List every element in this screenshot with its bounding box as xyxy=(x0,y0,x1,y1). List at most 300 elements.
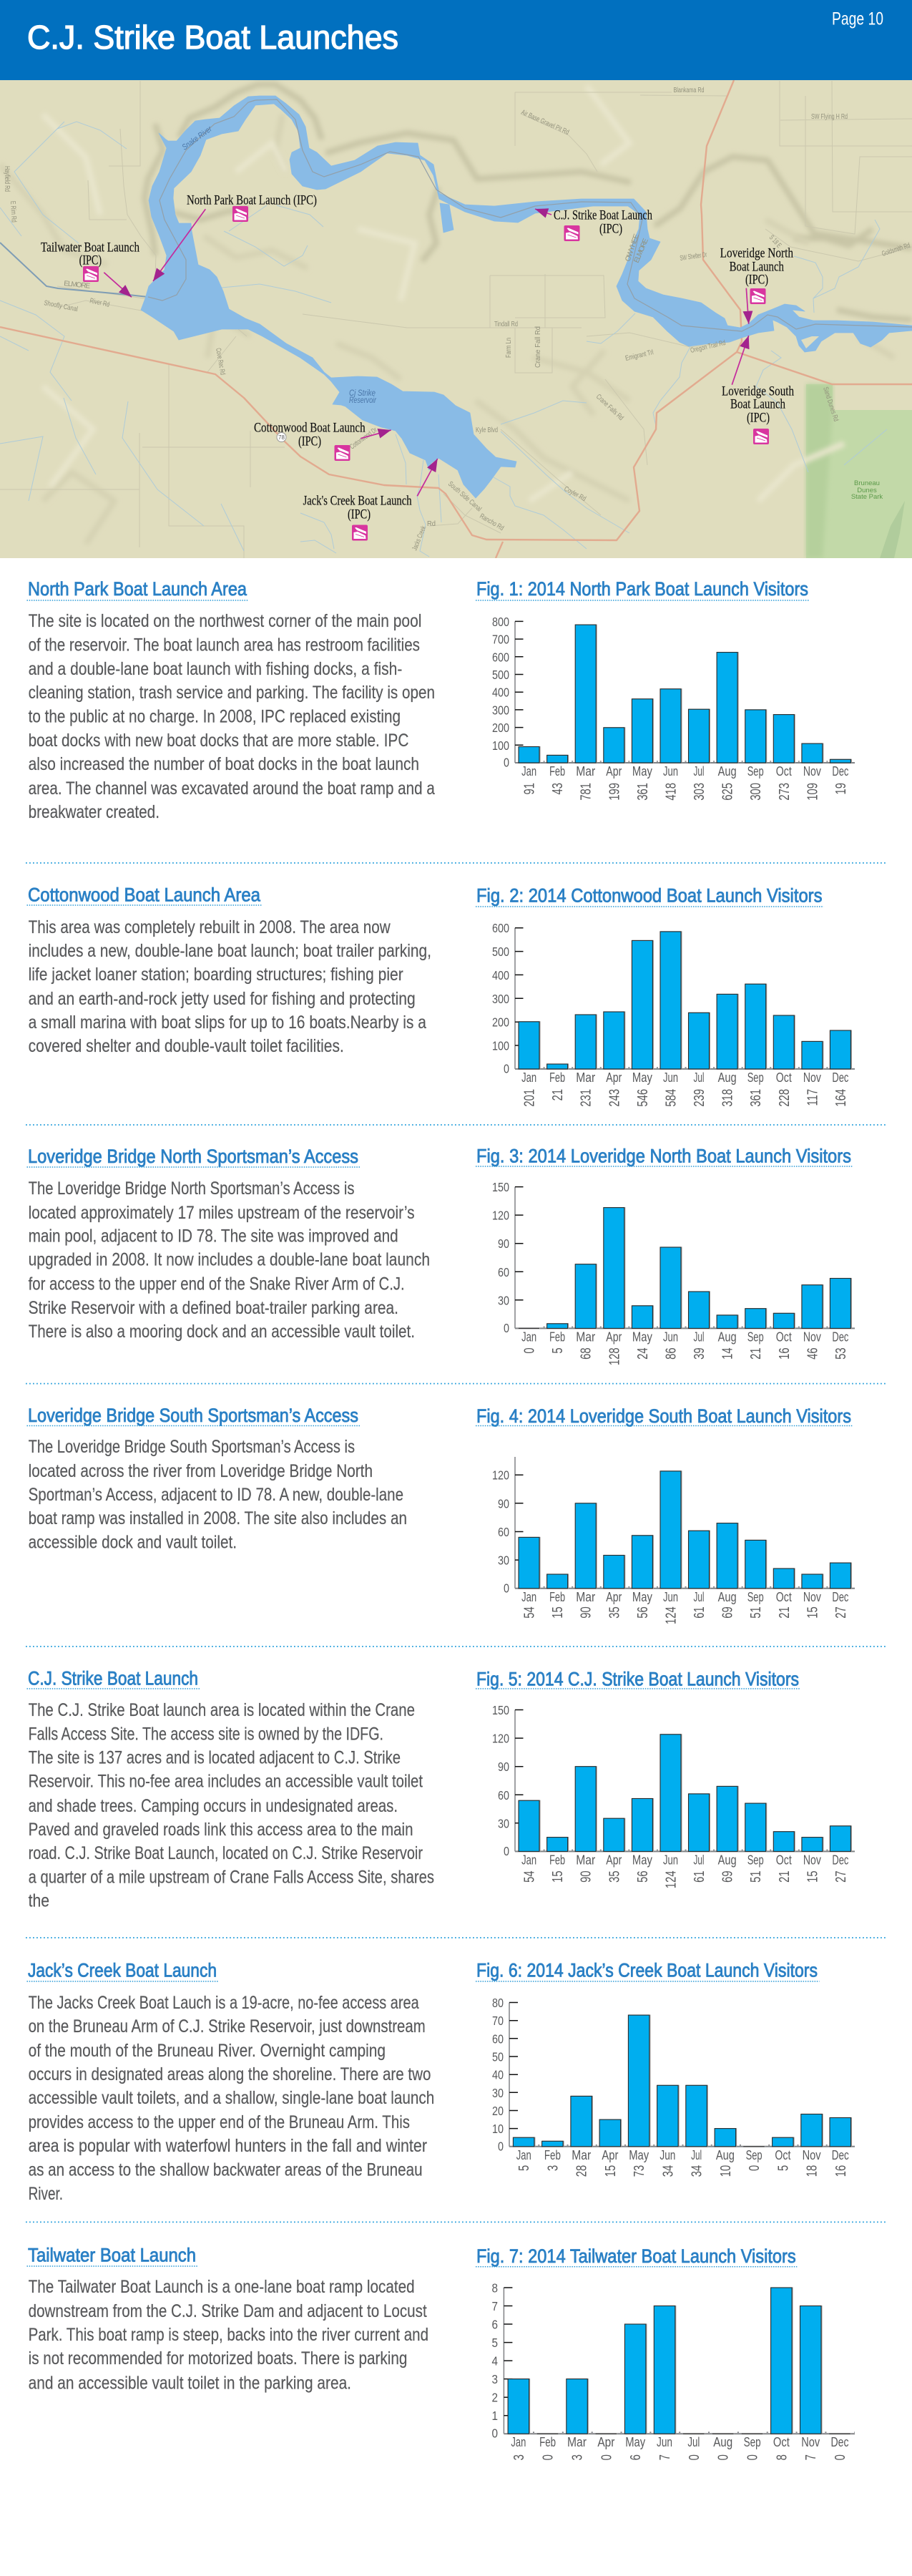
map place names: Blankama Rd xyxy=(674,87,704,94)
bar chart: Fig 3 Loveridge North: 30 xyxy=(498,1294,509,1308)
bar chart: Fig 2 Cottonwood: Apr xyxy=(606,1070,622,1085)
body text: Sportman’s Access, adjacent to ID 78. A new, double-lane xyxy=(29,1485,403,1505)
bar chart: Fig 2 Cottonwood: 164 xyxy=(833,1089,848,1107)
bar chart: Fig 6 Jack's Creek: Jun xyxy=(660,2148,675,2162)
bar chart: Fig 1 North Park: 91 xyxy=(521,783,537,794)
body text xyxy=(29,1993,434,2204)
bar chart: Fig 3 Loveridge North: 68 xyxy=(578,1347,594,1360)
bar chart: Fig 2 Cottonwood: 584 xyxy=(662,1089,679,1107)
bar chart: Fig 5 C.J. Strike: 0 xyxy=(504,1844,509,1858)
bar chart: Fig 7 Tailwater: 3 xyxy=(569,2454,585,2460)
bar chart: Fig 5 C.J. Strike: Mar xyxy=(576,1853,595,1867)
bar chart: Fig 6 Jack's Creek: 70 xyxy=(492,2014,504,2029)
bar chart: Fig 1 North Park: Jan xyxy=(521,764,536,779)
body text: a small marina with boat slips for up to 16 boats.Nearby is a xyxy=(29,1013,426,1033)
bar chart: Fig 5 C.J. Strike: 54 xyxy=(521,1870,537,1883)
panel: Jack's Creek text xyxy=(27,1960,434,2204)
callout: C.J. Strike xyxy=(535,208,652,241)
callout: Tailwater: (IPC) xyxy=(79,253,102,268)
bar chart: Fig 3 Loveridge North: 150 xyxy=(492,1181,509,1195)
bar chart: Fig 2 Cottonwood: Dec xyxy=(832,1070,848,1085)
bar chart: Fig 4 Loveridge South: Oct xyxy=(776,1590,792,1604)
bar chart: Fig 7 Tailwater: 0 xyxy=(598,2454,614,2460)
callout: Tailwater: Tailwater Boat Launch xyxy=(41,240,139,255)
bar chart: Fig 7 Tailwater: 0 xyxy=(832,2454,848,2460)
bar chart: Fig 1 North Park: Dec xyxy=(832,764,848,779)
bar chart: Fig 1 North Park: 800 xyxy=(492,615,509,629)
bar chart: Fig 5 C.J. Strike: Jan xyxy=(521,1853,536,1867)
bar chart: Fig 6 Jack's Creek: Mar xyxy=(572,2148,591,2162)
callout: C.J. Strike: C.J. Strike Boat Launch xyxy=(554,208,652,223)
highways xyxy=(0,80,912,558)
callout: Loveridge North: (IPC) xyxy=(745,272,768,287)
map place names: Emigrant Trl xyxy=(624,348,654,363)
bar chart: Fig 7 Tailwater: 4 xyxy=(491,2353,498,2368)
bar chart: Fig 2 Cottonwood: Oct xyxy=(776,1070,792,1085)
map place names: Hayfield Rd xyxy=(3,166,11,192)
bar chart: Fig 3 Loveridge North: 21 xyxy=(747,1347,764,1360)
map of boat launches xyxy=(0,80,912,558)
bar chart: Fig 5 C.J. Strike: 60 xyxy=(498,1788,509,1802)
map place names: Snake River xyxy=(181,125,214,152)
bar chart: Fig 4 Loveridge South: Jun xyxy=(663,1590,678,1604)
callout: Loveridge North: Boat Launch xyxy=(730,260,784,275)
bar chart: Fig 6 Jack's Creek: 15 xyxy=(602,2165,618,2177)
bar chart: Fig 5 C.J. Strike: Oct xyxy=(776,1853,792,1867)
panel: C.J. Strike text xyxy=(27,1667,434,1911)
map place names xyxy=(3,87,911,552)
map place names: Tindall Rd xyxy=(494,321,518,328)
state park area xyxy=(806,384,912,558)
bar chart: Fig 4 Loveridge South: Aug xyxy=(718,1590,737,1604)
bar chart: Fig 7 Tailwater: 2 xyxy=(491,2391,498,2405)
bar chart: Fig 5 C.J. Strike: Apr xyxy=(606,1853,622,1867)
body text: accessible vault toilets, and a shallow, single-lane boat launch xyxy=(29,2088,434,2108)
bar chart: Fig 7 Tailwater: Mar xyxy=(567,2435,587,2449)
bar chart: Fig 5 C.J. Strike: Aug xyxy=(718,1853,737,1867)
map place names: SW Shelter Dr xyxy=(680,251,707,263)
map place names: E Rim Rd xyxy=(9,201,18,223)
bar chart: Fig 3 Loveridge North: 86 xyxy=(662,1347,679,1360)
bar chart: Fig 6 Jack's Creek: 10 xyxy=(717,2165,733,2177)
body text: the xyxy=(29,1891,49,1911)
bar chart: Fig 3 Loveridge North: Jul xyxy=(694,1330,704,1344)
bar chart: Fig 4 Loveridge South: Apr xyxy=(606,1590,622,1604)
body text: breakwater created. xyxy=(29,802,160,822)
callout: Cottonwood: Cottonwood Boat Launch xyxy=(254,421,366,436)
bar chart: Fig 5 C.J. Strike: 61 xyxy=(691,1870,707,1883)
bar chart: Fig 6 Jack's Creek: Nov xyxy=(803,2148,821,2162)
bar chart: Fig 4 Loveridge South: 69 xyxy=(719,1606,735,1619)
bar chart: Fig 2 Cottonwood: 239 xyxy=(691,1089,707,1107)
bar chart: Fig 3 Loveridge North: 16 xyxy=(776,1347,792,1360)
body text: Park. This boat ramp is steep, backs into the river current and xyxy=(29,2325,428,2345)
map place names: Dunes xyxy=(857,487,877,494)
bar chart: Fig 5 C.J. Strike: 124 xyxy=(662,1870,679,1888)
bar chart: Fig 4 Loveridge South: 61 xyxy=(691,1606,707,1619)
bar chart: Fig 1 North Park: Jun xyxy=(663,764,678,779)
bar chart: Fig 4 Loveridge South xyxy=(492,1457,855,1624)
bar chart: Fig 7 Tailwater: 7 xyxy=(803,2454,819,2460)
body text: boat docks with new boat docks that are more stable. IPC xyxy=(29,731,408,751)
bar chart: Fig 5 C.J. Strike xyxy=(492,1704,855,1888)
bar chart: Fig 2 Cottonwood: 243 xyxy=(606,1089,622,1107)
figure heading 2: Fig. 2: 2014 Cottonwood Boat Launch Visitors xyxy=(476,885,823,907)
map place names: OWYHEE xyxy=(624,233,641,263)
body text: area. The channel was excavated around the boat ramp and a xyxy=(29,779,435,799)
map place names: ELMORE xyxy=(64,280,91,291)
bar chart: Fig 3 Loveridge North: Aug xyxy=(718,1330,737,1344)
bar chart: Fig 6 Jack's Creek xyxy=(492,1996,855,2177)
body text: also increased the number of boat docks in the boat launch xyxy=(29,754,419,774)
figure heading 5: Fig. 5: 2014 C.J. Strike Boat Launch Visitors xyxy=(476,1669,799,1690)
bar chart: Fig 1 North Park: 19 xyxy=(833,783,848,794)
callout: Jack's Creek: Jack's Creek Boat Launch xyxy=(303,494,412,509)
bar chart: Fig 2 Cottonwood: Jun xyxy=(663,1070,678,1085)
bar chart: Fig 7 Tailwater: Oct xyxy=(773,2435,790,2449)
body text: of the mouth of the Bruneau River. Overnight camping xyxy=(29,2041,386,2061)
bar chart: Fig 7 Tailwater: 0 xyxy=(491,2426,498,2441)
bar chart: Fig 4 Loveridge South: 15 xyxy=(804,1606,820,1619)
bar chart: Fig 3 Loveridge North xyxy=(492,1181,855,1365)
heading: Tailwater Boat Launch xyxy=(28,2245,196,2266)
bar chart: Fig 2 Cottonwood: 600 xyxy=(492,922,509,936)
callout: C.J. Strike: (IPC) xyxy=(599,222,622,236)
body text: The Tailwater Boat Launch is a one-lane boat ramp located xyxy=(29,2277,415,2297)
bar chart: Fig 7 Tailwater: 1 xyxy=(491,2409,498,2424)
heading: Loveridge Bridge South Sportsman’s Access xyxy=(28,1405,358,1426)
bar chart: Fig 5 C.J. Strike: 15 xyxy=(804,1870,820,1883)
bar chart: Fig 2 Cottonwood: 21 xyxy=(549,1089,566,1101)
bar chart: Fig 2 Cottonwood: 500 xyxy=(492,945,509,960)
bar chart: Fig 1 North Park: Aug xyxy=(718,764,737,779)
bar chart: Fig 1 North Park: Apr xyxy=(606,764,622,779)
bar chart: Fig 7 Tailwater: 0 xyxy=(744,2454,760,2460)
bar chart: Fig 1 North Park: 200 xyxy=(492,721,509,736)
bar chart: Fig 3 Loveridge North: Sep xyxy=(747,1330,764,1344)
highway 78 shield xyxy=(277,432,286,442)
bar chart: Fig 2 Cottonwood: 318 xyxy=(719,1089,735,1107)
body text: located across the river from Loveridge Bridge North xyxy=(29,1461,373,1481)
map place names: State Park xyxy=(851,493,883,501)
body text: on the Bruneau Arm of C.J. Strike Reservoir, just downstream xyxy=(29,2016,426,2036)
bar chart: Fig 5 C.J. Strike: 90 xyxy=(498,1760,509,1775)
bar chart: Fig 6 Jack's Creek: 16 xyxy=(833,2165,848,2177)
bar chart: Fig 6 Jack's Creek: 5 xyxy=(516,2165,532,2171)
bar chart: Fig 4 Loveridge South: Sep xyxy=(747,1590,764,1604)
bar chart: Fig 5 C.J. Strike: 35 xyxy=(606,1870,622,1883)
bar chart: Fig 3 Loveridge North: Oct xyxy=(776,1330,792,1344)
bar chart: Fig 1 North Park: 300 xyxy=(747,783,764,801)
map place names: River Rd xyxy=(89,297,110,309)
bar chart: Fig 4 Loveridge South: Nov xyxy=(803,1590,821,1604)
body text: River. xyxy=(29,2184,63,2204)
bar chart: Fig 3 Loveridge North: 60 xyxy=(498,1265,509,1279)
bar chart: Fig 2 Cottonwood: 300 xyxy=(492,992,509,1006)
callout: Jack's Creek xyxy=(303,459,438,541)
bar chart: Fig 1 North Park: 43 xyxy=(549,783,566,794)
bar chart: Fig 4 Loveridge South: 0 xyxy=(504,1581,509,1596)
bar chart: Fig 6 Jack's Creek: Sep xyxy=(746,2148,763,2162)
panel: Loveridge North text xyxy=(27,1146,430,1342)
bar chart: Fig 6 Jack's Creek: Jan xyxy=(516,2148,531,2162)
map place names: Crane Falls Rd xyxy=(594,393,625,422)
bar chart: Fig 3 Loveridge North: 0 xyxy=(504,1321,509,1335)
body text: road. C.J. Strike Boat Launch, located on C.J. Strike Reservoir xyxy=(29,1843,423,1863)
body text: The site is 137 acres and is located adjacent to C.J. Strike xyxy=(29,1748,401,1768)
callout: Tailwater xyxy=(41,240,139,297)
body text: of the reservoir. The boat launch area has restroom facilities xyxy=(29,635,420,655)
body text: occurs in designated areas along the shoreline. There are two xyxy=(29,2064,431,2084)
body text: The Loveridge Bridge South Sportsman’s Access is xyxy=(29,1437,355,1457)
callout: Loveridge South: Loveridge South xyxy=(722,384,794,399)
bar chart: Fig 7 Tailwater xyxy=(491,2280,855,2460)
minor roads xyxy=(0,81,912,558)
bar chart: Fig 2 Cottonwood: Jul xyxy=(694,1070,704,1085)
bar chart: Fig 2 Cottonwood: Feb xyxy=(549,1070,565,1085)
body text: The Loveridge Bridge North Sportsman’s Access is xyxy=(29,1179,354,1199)
bar chart: Fig 6 Jack's Creek: 5 xyxy=(775,2165,791,2171)
bar chart: Fig 5 C.J. Strike: 51 xyxy=(747,1870,764,1883)
bar chart: Fig 1 North Park: Feb xyxy=(549,764,565,779)
body text: downstream from the C.J. Strike Dam and adjacent to Locust xyxy=(29,2301,427,2321)
map place names: Shoofly Canal xyxy=(43,299,79,313)
map place names: Cj Strike xyxy=(349,389,376,398)
bar chart: Fig 6 Jack's Creek: Jul xyxy=(691,2148,702,2162)
bar chart: Fig 5 C.J. Strike: Feb xyxy=(549,1853,565,1867)
bar chart: Fig 7 Tailwater: 6 xyxy=(627,2454,644,2460)
body text: for access to the upper end of the Snake River Arm of C.J. xyxy=(29,1274,405,1294)
map place names: Rancho Rd xyxy=(478,512,505,532)
bar chart: Fig 7 Tailwater: 0 xyxy=(686,2454,702,2460)
body text: is not recommended for motorized boats. There is parking xyxy=(29,2348,407,2368)
bar chart: Fig 3 Loveridge North: Dec xyxy=(832,1330,848,1344)
bar chart: Fig 7 Tailwater: 3 xyxy=(491,2372,498,2386)
bar chart: Fig 6 Jack's Creek: 28 xyxy=(574,2165,589,2177)
bar chart: Fig 2 Cottonwood: 546 xyxy=(634,1089,650,1107)
body text: provides access to the upper end of the Bruneau Arm. This xyxy=(29,2112,410,2132)
body text: The Jacks Creek Boat Lauch is a 19-acre, no-fee access area xyxy=(29,1993,419,2013)
bar chart: Fig 1 North Park: 700 xyxy=(492,633,509,647)
body text: Reservoir. This no-fee area includes an accessible vault toilet xyxy=(29,1772,423,1792)
callout: North Park xyxy=(153,193,317,281)
bar chart: Fig 6 Jack's Creek: 20 xyxy=(492,2104,504,2118)
bar chart: Fig 6 Jack's Creek: 80 xyxy=(492,1996,504,2010)
map place names: S 18 E xyxy=(768,234,783,250)
title: C.J. Strike Boat Launches xyxy=(27,19,398,56)
body text: The site is located on the northwest corner of the main pool xyxy=(29,611,421,631)
body text: accessible dock and vault toilet. xyxy=(29,1533,237,1553)
bar chart: Fig 4 Loveridge South: Feb xyxy=(549,1590,565,1604)
map place names: ELMORE xyxy=(633,237,650,264)
bar chart: Fig 7 Tailwater: 7 xyxy=(491,2299,498,2313)
bar chart: Fig 6 Jack's Creek: Oct xyxy=(775,2148,790,2162)
bar chart: Fig 5 C.J. Strike: 30 xyxy=(498,1817,509,1831)
bar chart: Fig 2 Cottonwood: Jan xyxy=(521,1070,536,1085)
bar chart: Fig 2 Cottonwood: May xyxy=(632,1070,652,1085)
bar chart: Fig 1 North Park: 273 xyxy=(776,783,792,801)
bar chart: Fig 6 Jack's Creek: Aug xyxy=(716,2148,735,2162)
body text: located approximately 17 miles upstream of the reservoir’s xyxy=(29,1203,415,1223)
map place names: Kyle Blvd xyxy=(476,426,498,434)
callout: Loveridge South xyxy=(722,336,794,444)
heading: C.J. Strike Boat Launch xyxy=(28,1667,198,1689)
bar chart: Fig 6 Jack's Creek: Feb xyxy=(544,2148,561,2162)
bar chart: Fig 6 Jack's Creek: 50 xyxy=(492,2050,504,2064)
bar chart: Fig 6 Jack's Creek: 0 xyxy=(746,2165,763,2171)
body text xyxy=(29,611,435,822)
bar chart: Fig 2 Cottonwood: 231 xyxy=(578,1089,594,1107)
light terrain highlights xyxy=(43,86,844,501)
bar chart: Fig 7 Tailwater: Dec xyxy=(831,2435,848,2449)
bar chart: Fig 5 C.J. Strike: 27 xyxy=(833,1870,848,1883)
bar chart: Fig 4 Loveridge South: 51 xyxy=(747,1606,764,1619)
bar chart: Fig 4 Loveridge South: 56 xyxy=(634,1606,650,1619)
body text: Strike Reservoir with a defined boat-trailer parking area. xyxy=(29,1298,398,1318)
bar chart: Fig 4 Loveridge South: 15 xyxy=(549,1606,566,1619)
bar chart: Fig 1 North Park: 361 xyxy=(634,783,650,801)
map place names: Sand Dunes Rd xyxy=(821,386,840,422)
bar chart: Fig 1 North Park: 418 xyxy=(662,783,679,801)
bar chart: Fig 4 Loveridge South: Mar xyxy=(576,1590,595,1604)
bar chart: Fig 3 Loveridge North: May xyxy=(632,1330,652,1344)
soft terrain shading xyxy=(0,114,894,544)
bar chart: Fig 1 North Park: 109 xyxy=(804,783,820,801)
body text: and an earth-and-rock jetty used for fishing and protecting xyxy=(29,989,416,1009)
bar chart: Fig 2 Cottonwood: 228 xyxy=(776,1089,792,1107)
bar chart: Fig 4 Loveridge South: 35 xyxy=(606,1606,622,1619)
bar chart: Fig 5 C.J. Strike: May xyxy=(632,1853,652,1867)
bar chart: Fig 7 Tailwater: 7 xyxy=(657,2454,673,2460)
body text: There is also a mooring dock and an accessible vault toilet. xyxy=(29,1322,415,1342)
bar chart: Fig 2 Cottonwood: 100 xyxy=(492,1039,509,1053)
land pockets in river xyxy=(801,336,819,348)
callout: North Park: North Park Boat Launch (IPC) xyxy=(187,193,317,208)
body text: upgraded in 2008. It now includes a double-lane boat launch xyxy=(29,1250,430,1270)
bar chart: Fig 1 North Park: 199 xyxy=(606,783,622,801)
highway 78 shield: 78 xyxy=(278,434,285,441)
body text: Falls Access Site. The access site is owned by the IDFG. xyxy=(29,1724,383,1745)
map place names: South Side Canal xyxy=(446,480,483,513)
bar chart: Fig 4 Loveridge South: 90 xyxy=(498,1497,509,1511)
bar chart: Fig 1 North Park: 100 xyxy=(492,738,509,753)
bar chart: Fig 1 North Park: Nov xyxy=(803,764,821,779)
map place names: Bruneau xyxy=(854,479,880,487)
bar chart: Fig 7 Tailwater: 8 xyxy=(773,2454,790,2460)
body text: area is popular with waterfowl hunters in the fall and winter xyxy=(29,2136,427,2156)
body text: This area was completely rebuilt in 2008. The area now xyxy=(29,917,391,937)
bar chart: Fig 2 Cottonwood: Mar xyxy=(576,1070,595,1085)
bar chart: Fig 3 Loveridge North: 5 xyxy=(549,1347,566,1354)
bar chart: Fig 1 North Park: 300 xyxy=(492,703,509,718)
bar chart: Fig 2 Cottonwood: Sep xyxy=(747,1070,764,1085)
bar chart: Fig 2 Cottonwood: Aug xyxy=(718,1070,737,1085)
bar chart: Fig 6 Jack's Creek: Apr xyxy=(602,2148,618,2162)
bar chart: Fig 7 Tailwater: Jul xyxy=(687,2435,700,2449)
bar chart: Fig 4 Loveridge South: 21 xyxy=(776,1606,792,1619)
bar chart: Fig 3 Loveridge North: Jun xyxy=(663,1330,678,1344)
bar chart: Fig 2 Cottonwood: 117 xyxy=(804,1089,820,1106)
bar chart: Fig 3 Loveridge North: 53 xyxy=(833,1347,848,1360)
bar chart: Fig 3 Loveridge North: 39 xyxy=(691,1347,707,1360)
panel: Loveridge South text xyxy=(27,1405,407,1553)
bar chart: Fig 3 Loveridge North: 120 xyxy=(492,1209,509,1223)
bar chart: Fig 4 Loveridge South: 54 xyxy=(521,1606,537,1619)
figure heading 3: Fig. 3: 2014 Loveridge North Boat Launch Visitors xyxy=(476,1145,851,1166)
bar chart: Fig 3 Loveridge North: 14 xyxy=(719,1347,735,1360)
body text: life jacket loaner station; boarding structures; fishing pier xyxy=(29,965,403,985)
bar chart: Fig 1 North Park: 600 xyxy=(492,650,509,665)
bar chart: Fig 1 North Park: Jul xyxy=(694,764,704,779)
bar chart: Fig 6 Jack's Creek: 3 xyxy=(544,2165,561,2171)
bar chart: Fig 6 Jack's Creek: May xyxy=(629,2148,649,2162)
bar chart: Fig 3 Loveridge North: Nov xyxy=(803,1330,821,1344)
body text: includes a new, double-lane boat launch; boat trailer parking, xyxy=(29,941,431,961)
bar chart: Fig 1 North Park: 303 xyxy=(691,783,707,801)
bar chart: Fig 3 Loveridge North: 0 xyxy=(521,1347,537,1354)
bar chart: Fig 4 Loveridge South: May xyxy=(632,1590,652,1604)
map place names: Air Base Gravel Pit Rd xyxy=(520,109,570,137)
bar chart: Fig 2 Cottonwood: Nov xyxy=(803,1070,821,1085)
bar chart: Fig 1 North Park: 500 xyxy=(492,668,509,682)
bar chart: Fig 7 Tailwater: Aug xyxy=(713,2435,732,2449)
bar chart: Fig 7 Tailwater: Feb xyxy=(539,2435,556,2449)
bar chart: Fig 7 Tailwater: May xyxy=(625,2435,645,2449)
bar chart: Fig 7 Tailwater: 3 xyxy=(511,2454,526,2460)
body text: main pool, adjacent to ID 78. The site was improved and xyxy=(29,1226,398,1246)
bar chart: Fig 1 North Park xyxy=(492,615,855,801)
body text xyxy=(29,2277,428,2393)
bar chart: Fig 3 Loveridge North: Mar xyxy=(576,1330,595,1344)
bar chart: Fig 3 Loveridge North: Apr xyxy=(606,1330,622,1344)
bar chart: Fig 5 C.J. Strike: Sep xyxy=(747,1853,764,1867)
bar chart: Fig 6 Jack's Creek: 60 xyxy=(492,2032,504,2046)
bar chart: Fig 2 Cottonwood xyxy=(492,922,855,1107)
reservoir and river water xyxy=(141,96,912,498)
bar chart: Fig 6 Jack's Creek: 40 xyxy=(492,2068,504,2082)
heading: North Park Boat Launch Area xyxy=(28,578,247,600)
bar chart: Fig 1 North Park: 781 xyxy=(578,783,594,801)
map place names: Oregon Trail Rd xyxy=(690,339,726,355)
river channel line xyxy=(148,99,912,331)
bar chart: Fig 6 Jack's Creek: Dec xyxy=(832,2148,849,2162)
canal xyxy=(0,243,148,297)
body text: boat ramp was installed in 2008. The site also includes an xyxy=(29,1508,407,1528)
bar chart: Fig 5 C.J. Strike: Jul xyxy=(694,1853,704,1867)
body text: Paved and graveled roads link this access area to the main xyxy=(29,1820,413,1840)
bar chart: Fig 7 Tailwater: 0 xyxy=(715,2454,731,2460)
heading: Cottonwood Boat Launch Area xyxy=(28,884,261,906)
bar chart: Fig 3 Loveridge North: 46 xyxy=(804,1347,820,1360)
bar chart: Fig 5 C.J. Strike: Nov xyxy=(803,1853,821,1867)
bar chart: Fig 4 Loveridge South: 27 xyxy=(833,1606,848,1619)
map place names: Cottonwood Dr xyxy=(348,426,379,451)
bar chart: Fig 7 Tailwater: 6 xyxy=(491,2317,498,2332)
bar chart: Fig 5 C.J. Strike: 21 xyxy=(776,1870,792,1883)
map place names: Farm Ln xyxy=(505,338,513,358)
bar chart: Fig 6 Jack's Creek: 0 xyxy=(498,2140,504,2154)
body text: and an accessible vault toilet in the parking area. xyxy=(29,2373,351,2393)
bar chart: Fig 1 North Park: 625 xyxy=(719,783,735,801)
bar chart: Fig 4 Loveridge South: 30 xyxy=(498,1553,509,1568)
bar chart: Fig 4 Loveridge South: 60 xyxy=(498,1526,509,1539)
callout: Loveridge North: Loveridge North xyxy=(720,246,793,261)
map place names: Crane Fall Rd xyxy=(534,326,542,368)
bar chart: Fig 5 C.J. Strike: 120 xyxy=(492,1732,509,1746)
bar chart: Fig 5 C.J. Strike: 15 xyxy=(549,1870,566,1883)
callout: Loveridge South: Boat Launch xyxy=(730,396,785,411)
body text: a quarter of a mile upstream of Crane Falls Access Site, shares xyxy=(29,1868,434,1888)
